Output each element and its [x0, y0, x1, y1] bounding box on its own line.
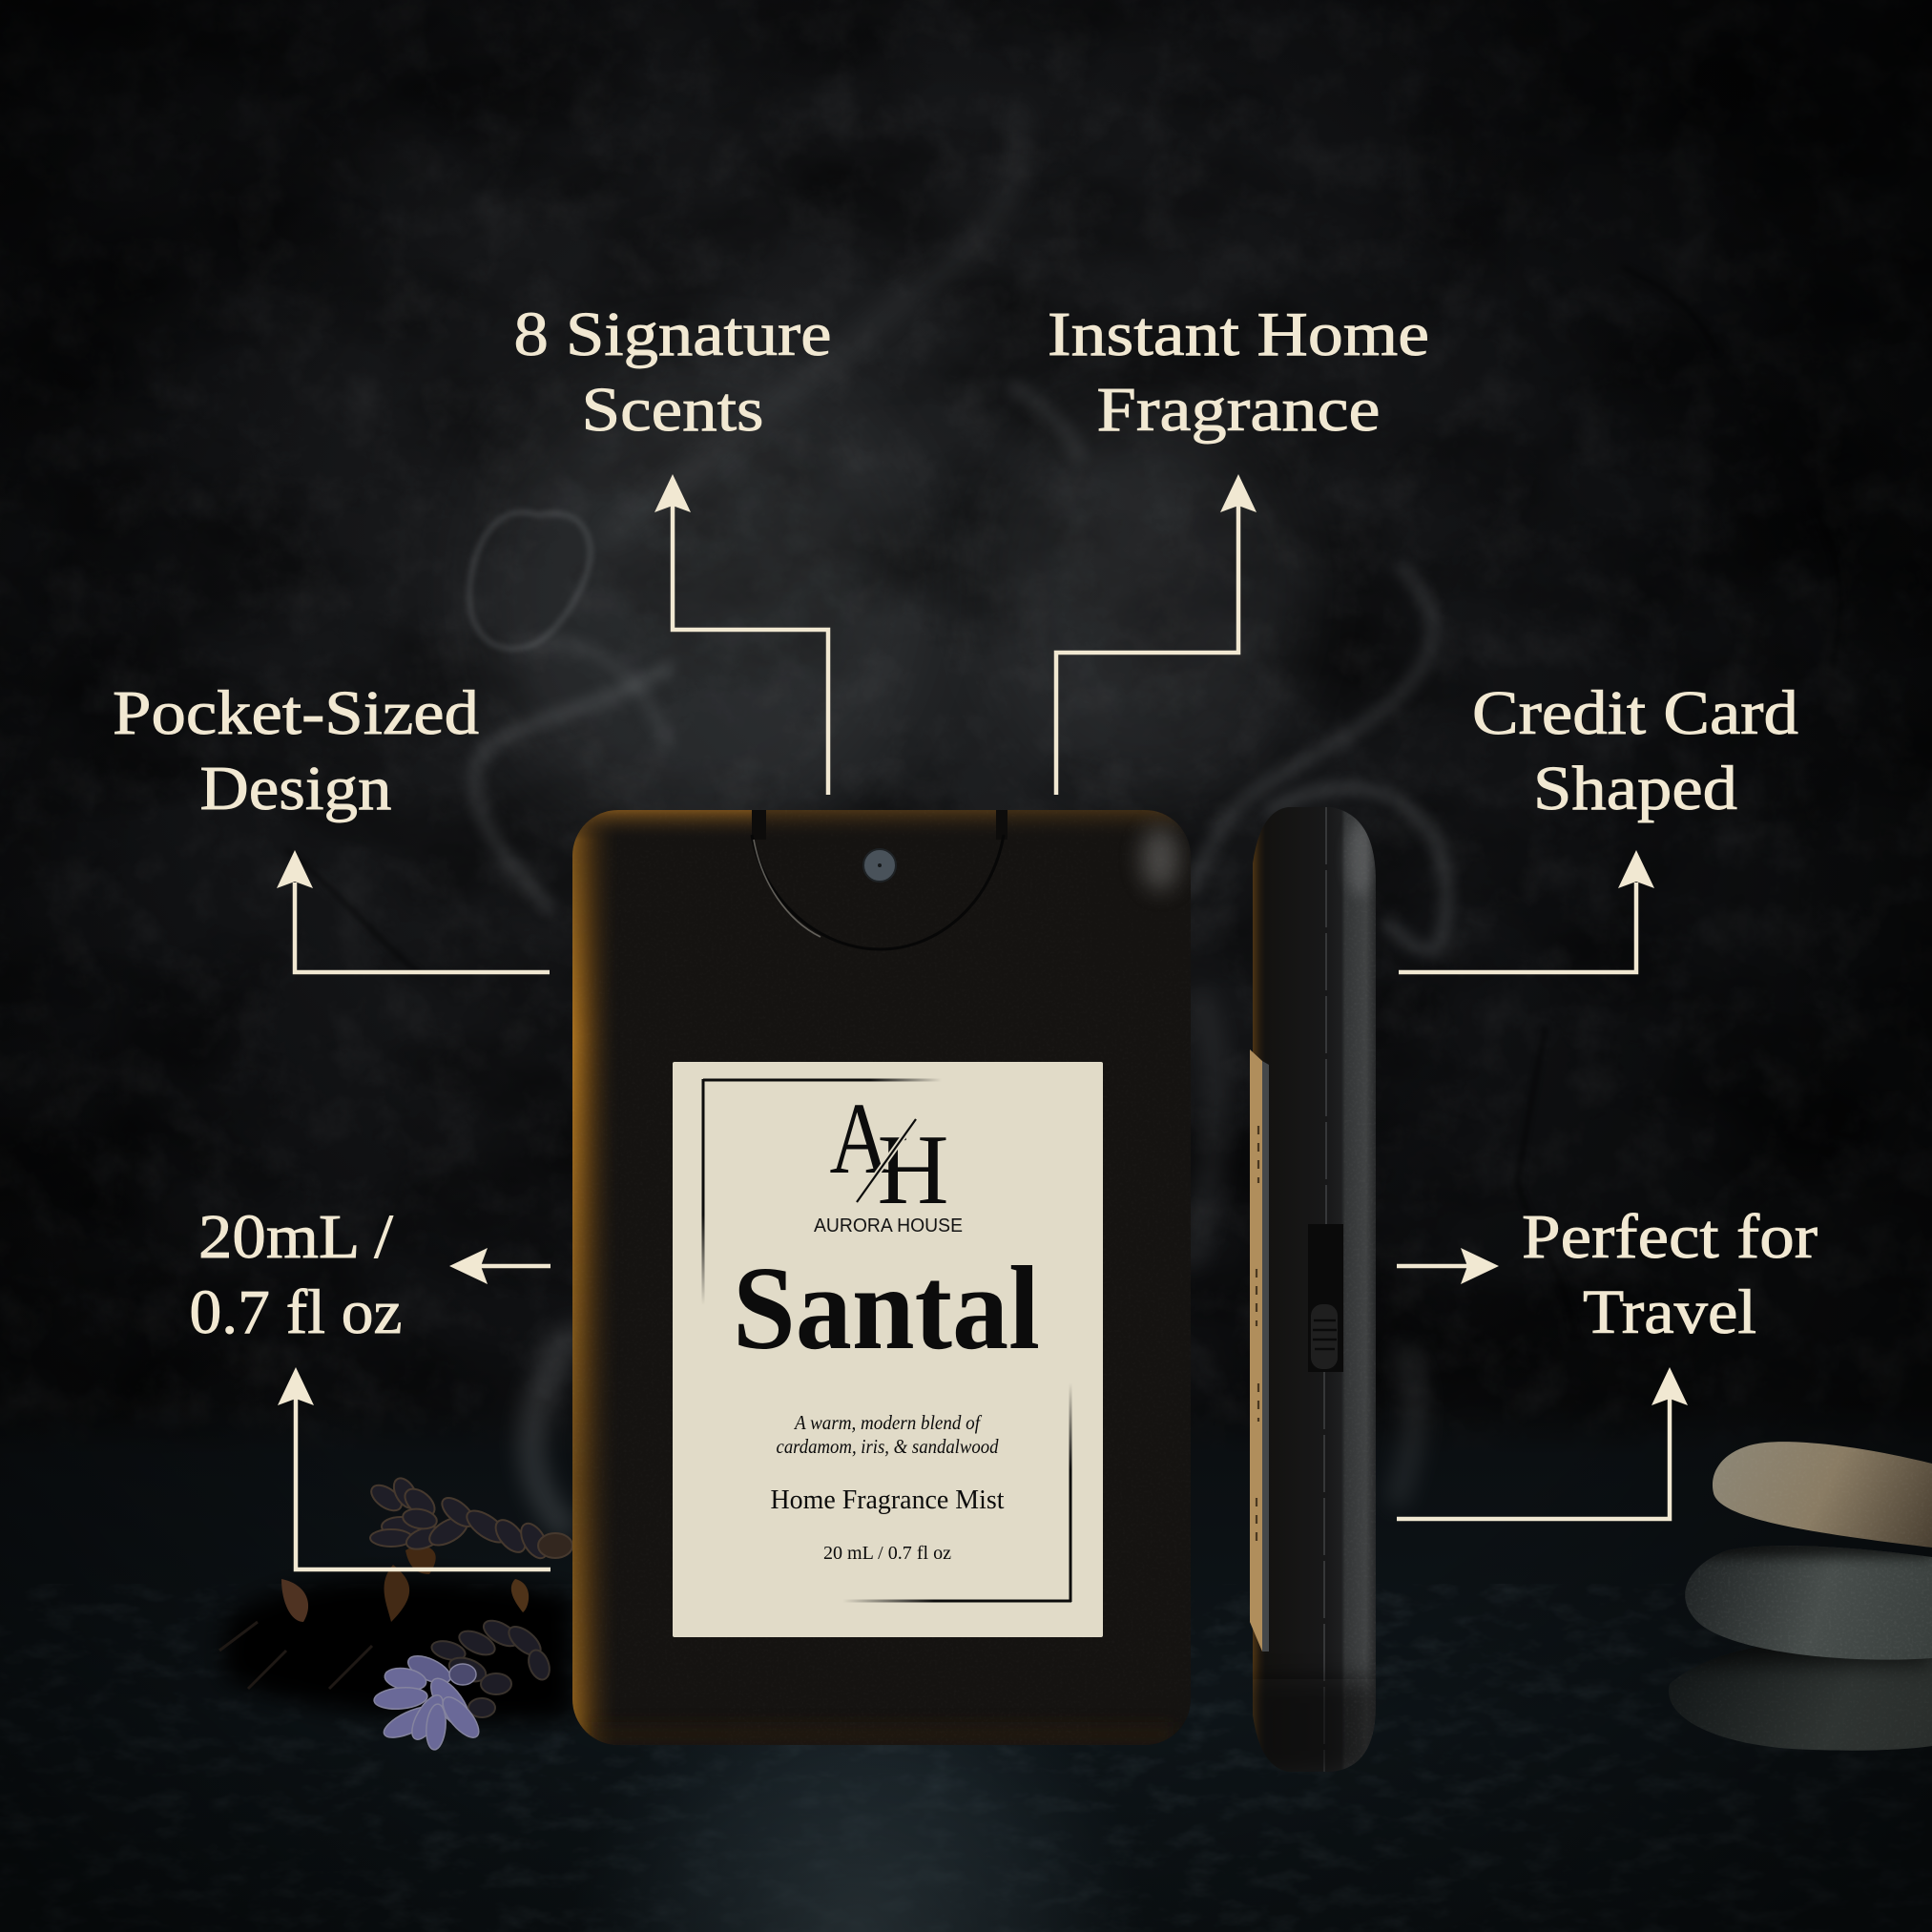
top stone: [1708, 1436, 1932, 1550]
dark upper sprig: [367, 1474, 572, 1563]
label frame lines: [703, 1079, 1071, 1602]
product: spray card side view: [1250, 807, 1379, 1775]
callout: Credit Card Shaped: Shaped: [1533, 754, 1737, 823]
scent description: [777, 1411, 999, 1458]
callout: Instant Home Fragrance: Fragrance: [1097, 375, 1380, 445]
arrow: up to 0.7 fl oz: [278, 1367, 551, 1569]
middle stone: [1685, 1546, 1932, 1660]
AH monogram: H: [878, 1113, 948, 1225]
bright lavender bud cluster: [373, 1651, 485, 1751]
arrow: up to Perfect for Travel: [1397, 1367, 1688, 1519]
dried lavender sprigs: [219, 1474, 572, 1751]
callout: Perfect for Travel: Travel: [1583, 1278, 1756, 1347]
callout: Pocket-Sized Design: [113, 678, 479, 823]
brand name: AURORA HOUSE: [814, 1215, 963, 1236]
arrow: right to Perfect for Travel: [1397, 1248, 1499, 1284]
callout: Pocket-Sized Design: Design: [200, 754, 391, 823]
product label: [673, 1062, 1103, 1637]
side slot and switch: [1308, 1224, 1343, 1372]
volume: 20 mL / 0.7 fl oz: [823, 1543, 951, 1564]
scent description: cardamom, iris, & sandalwood: [777, 1435, 999, 1458]
AH monogram: A: [830, 1083, 889, 1195]
scent description: A warm, modern blend of: [793, 1411, 983, 1434]
stacked stones: [1660, 1436, 1932, 1755]
smoke wisps: [467, 114, 1446, 1527]
callout: Perfect for Travel: [1522, 1202, 1818, 1347]
lower sprig buds: [429, 1615, 553, 1717]
product: spray card front view: [572, 810, 1191, 1747]
callout: 8 Signature Scents: Scents: [582, 375, 763, 445]
callout: 20mL / 0.7 fl oz: 0.7 fl oz: [189, 1278, 403, 1347]
scent name: Santal: [733, 1243, 1040, 1375]
callout: Pocket-Sized Design: Pocket-Sized: [113, 678, 479, 748]
leaves: [219, 1546, 572, 1721]
callout: 8 Signature Scents: 8 Signature: [513, 300, 832, 369]
callout: Credit Card Shaped: [1472, 678, 1798, 823]
callout: Instant Home Fragrance: Instant Home: [1048, 300, 1429, 369]
callout: 20mL / 0.7 fl oz: [189, 1202, 403, 1347]
arrow: to Instant Home Fragrance: [1056, 474, 1257, 795]
bottom stone: [1669, 1650, 1932, 1751]
nozzle: [863, 849, 896, 882]
arrow: to Credit Card Shaped: [1399, 850, 1654, 972]
spray cap: [752, 810, 1008, 949]
arrow: left to 20mL: [449, 1248, 551, 1284]
callout: Perfect for Travel: Perfect for: [1522, 1202, 1818, 1272]
AH monogram: [830, 1083, 948, 1225]
callout: 8 Signature Scents: [513, 300, 832, 445]
callout: 20mL / 0.7 fl oz: 20mL /: [198, 1202, 394, 1272]
side label strip: [1250, 1049, 1269, 1652]
product type: Home Fragrance Mist: [771, 1485, 1005, 1515]
arrow: to Pocket-Sized Design: [277, 850, 550, 972]
callout: Instant Home Fragrance: [1048, 300, 1429, 445]
callout: Credit Card Shaped: Credit Card: [1472, 678, 1798, 748]
arrow: to 8 Signature Scents: [654, 474, 828, 795]
